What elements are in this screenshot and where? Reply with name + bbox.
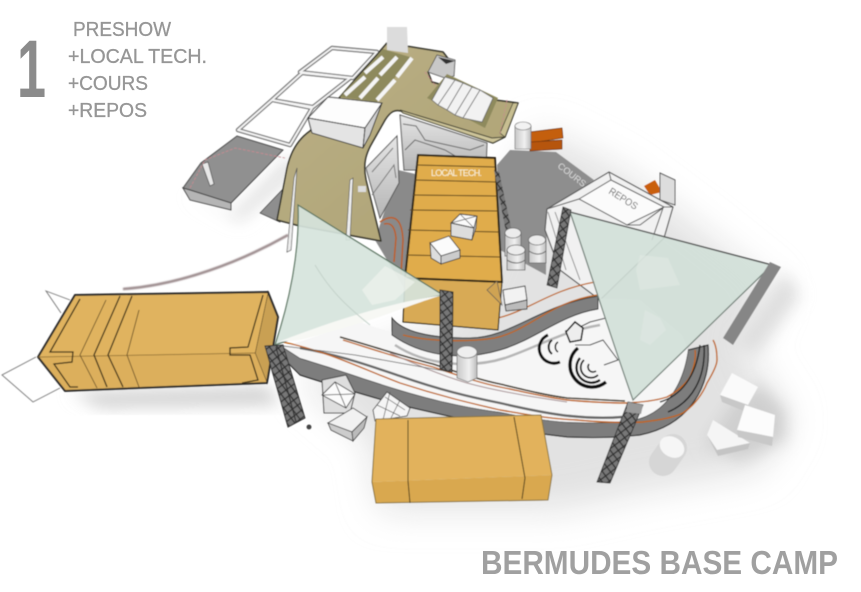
white post left (287, 168, 297, 252)
panel: left translucent sail (275, 205, 450, 372)
wheel front (570, 348, 606, 387)
crate top (322, 375, 355, 413)
left wall panel (366, 136, 399, 218)
panel: white track platform (283, 282, 717, 438)
gray floor (183, 136, 283, 203)
crate on deck rear (451, 214, 477, 240)
gray mast: right (723, 262, 781, 345)
label: COURS: COURS (556, 161, 588, 189)
block right (737, 405, 775, 446)
white post right (346, 178, 353, 240)
small crates cluster (322, 375, 410, 441)
orange behind repos (644, 180, 662, 195)
plank lines (406, 165, 500, 257)
panel: LOCAL TECH. yellow deck (403, 155, 502, 330)
panel: lower yellow container (372, 415, 552, 503)
label: REPOS: REPOS (606, 186, 640, 213)
crate on deck front (430, 236, 460, 264)
upper orange lines (403, 282, 597, 341)
frame post (202, 162, 214, 186)
truss: left mast (265, 345, 305, 427)
skylight strip (340, 49, 410, 102)
crate by deck (503, 286, 527, 311)
gray end panel (660, 173, 675, 205)
cylinder: white stool (656, 432, 688, 462)
olive shell (277, 43, 518, 241)
truss: lower right mast (597, 402, 643, 483)
barrel on track (457, 346, 477, 382)
dark line on deck (340, 337, 625, 401)
pink guide on roof (425, 72, 507, 134)
crate right (373, 392, 410, 421)
barrels group (505, 228, 546, 270)
pink line (390, 353, 567, 402)
line: cours: +COURS (68, 73, 148, 95)
upper band (392, 296, 598, 356)
arc on right (660, 345, 704, 412)
illustration: car on deck (539, 318, 618, 387)
guy curve from building (123, 235, 288, 289)
line: preshow: PRESHOW (73, 19, 171, 41)
roof rim (400, 110, 505, 143)
solar panels on roof (427, 74, 498, 128)
corner brackets (50, 295, 263, 387)
track orange inner (343, 340, 695, 403)
wire triangles (2, 291, 70, 402)
roof notch (428, 55, 455, 78)
skylight bars (345, 57, 412, 100)
white box on roof (308, 97, 382, 148)
line: repos: +REPOS (68, 100, 147, 122)
white frame rails (238, 48, 377, 145)
truss beside local tech (494, 170, 512, 232)
track orange outer (283, 340, 717, 422)
block front (707, 420, 750, 456)
crate below (328, 408, 367, 441)
dot marker (306, 424, 312, 430)
pink guide line (190, 148, 285, 188)
side gray floor under building (260, 190, 282, 222)
orange pipes and barrels behind building (515, 122, 563, 151)
chimney (387, 27, 408, 53)
panel: main olive building (277, 27, 518, 252)
panel: REPOS tent (545, 172, 675, 300)
white deck (283, 298, 688, 423)
outer track band (283, 345, 708, 438)
strap lines (80, 300, 139, 388)
wall under roof (400, 115, 487, 170)
block top (720, 373, 758, 412)
white blocks cluster (707, 373, 775, 456)
gray stripe on deck (300, 348, 622, 418)
label: LOCAL TECH.: LOCAL TECH. (431, 168, 482, 178)
programme list (68, 19, 207, 122)
truss: center mast (440, 290, 453, 372)
numeral 1: 1 (17, 24, 46, 115)
truss: repos mast (547, 207, 571, 288)
line: local tech: +LOCAL TECH. (68, 46, 207, 68)
scene: base camp drawing (2, 27, 800, 510)
gray plaza COURS (497, 150, 594, 275)
gray floor beside local tech (375, 170, 420, 290)
small vent (358, 186, 366, 192)
panel: right translucent sail (570, 212, 772, 400)
panel: large yellow container (2, 291, 278, 402)
wheel rear (539, 335, 560, 363)
left platform with frames (183, 48, 377, 210)
orange pipe by building (380, 218, 403, 275)
ground shadows (70, 130, 800, 510)
